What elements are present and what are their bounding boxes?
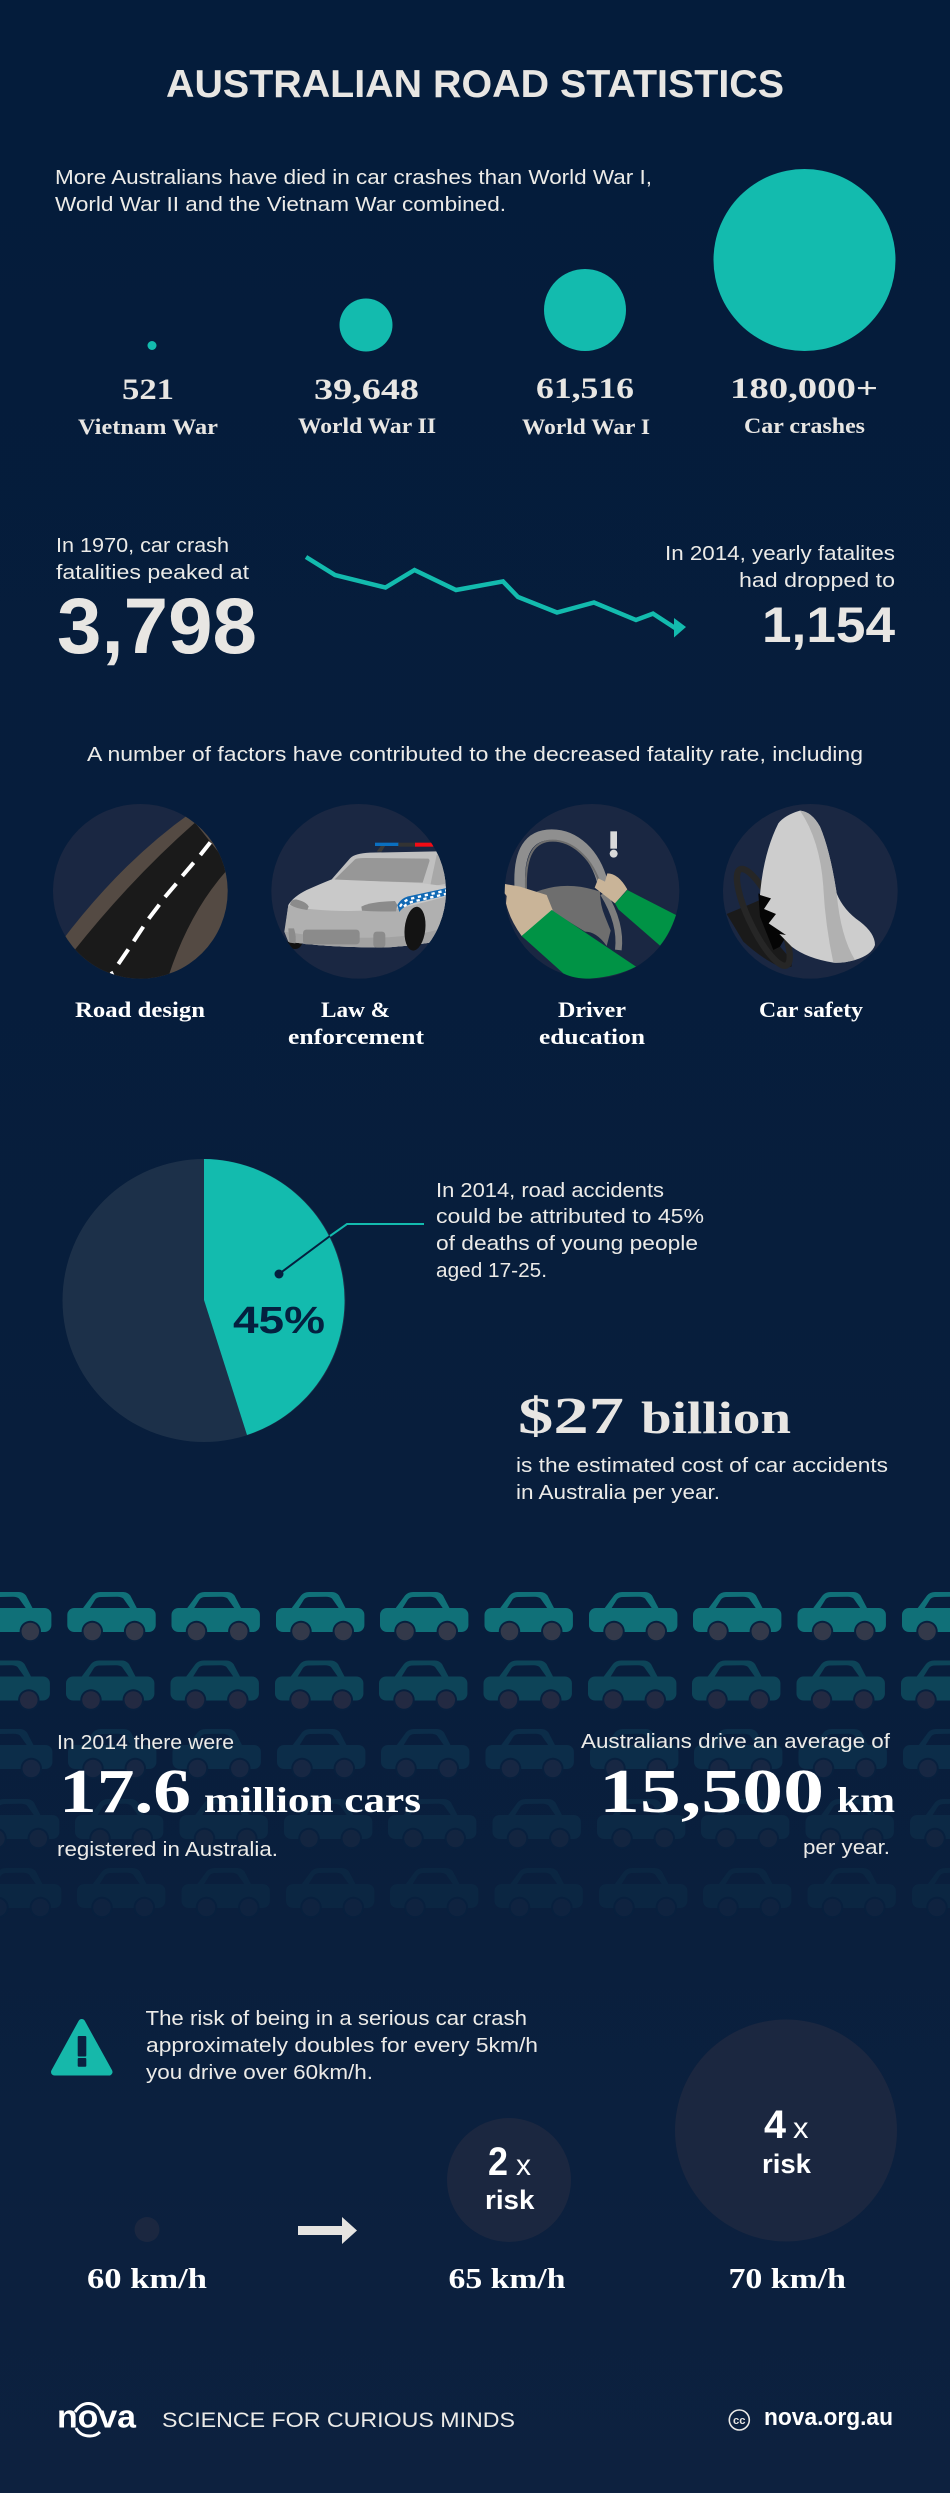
arrow: [298, 2217, 357, 2244]
label: 521 Vietnam War: [78, 373, 218, 439]
risk explanation text: [146, 2008, 538, 2084]
label: 70 km/h: 70 km/h: [728, 2264, 847, 2295]
callout text: could be attributed to 45%: [436, 1206, 704, 1228]
icon: airbag: [723, 804, 898, 979]
bubble: 2x risk: 2: [488, 2140, 508, 2184]
title: AUSTRALIAN ROAD STATISTICS: [166, 63, 784, 106]
text: 2014 figure: [665, 543, 895, 653]
text: 1970 peak: [56, 535, 257, 670]
bubble: 2x risk: risk: [485, 2185, 536, 2215]
text: 1970 peak: fatalities peaked at: [56, 562, 250, 584]
panel: cost of accidents: $27: [518, 1388, 624, 1445]
callout text: aged 17-25.: [436, 1260, 547, 1282]
label: 39,648 World War II: World War II: [298, 413, 436, 438]
bubble: 2x risk: [447, 2118, 571, 2242]
callout text: of deaths of young people: [436, 1233, 698, 1255]
panel: registered cars: In 2014 there were: [57, 1732, 234, 1754]
label: Law & enforcement: enforcement: [288, 1024, 425, 1049]
label: 521 Vietnam War: 521: [122, 373, 174, 406]
line chart: decline in fatalities: [306, 557, 686, 638]
text: 2014 figure: had dropped to: [739, 570, 895, 592]
panel: cost of accidents: billion: [641, 1392, 791, 1443]
label: Driver education: education: [539, 1024, 645, 1049]
panel: registered cars: [57, 1732, 421, 1861]
label: 521 Vietnam War: Vietnam War: [78, 414, 218, 439]
label: 61,516 World War I: 61,516: [536, 372, 634, 405]
bubble: World War II: [340, 298, 392, 352]
website: nova.org.au: [764, 2404, 893, 2431]
label: Law & enforcement: Law &: [321, 997, 390, 1022]
callout text: [436, 1180, 704, 1282]
label: 61,516 World War I: World War I: [522, 414, 650, 439]
icon: creative commons: cc: [733, 2415, 746, 2427]
panel: registered cars: million cars: [204, 1780, 421, 1820]
label: Law & enforcement: [288, 997, 425, 1049]
icon: police car: [271, 804, 450, 979]
callout leader line: [274, 1224, 424, 1278]
panel: young people deaths pie: [62, 1159, 704, 1442]
text: 1970 peak: In 1970, car crash: [56, 535, 229, 557]
footer: [57, 2398, 893, 2436]
panel: registered cars: 17.6: [59, 1758, 191, 1826]
label: 39,648 World War II: 39,648: [314, 373, 419, 406]
text: 2014 figure: In 2014, yearly fatalites: [665, 543, 895, 565]
icon: warning triangle: [54, 2022, 109, 2072]
text: 2014 figure: 1,154: [762, 597, 895, 653]
bubble: 2x risk: x: [516, 2149, 531, 2182]
tagline: SCIENCE FOR CURIOUS MINDS: [162, 2409, 515, 2432]
pie chart: 45%: [62, 1159, 346, 1442]
label: 65 km/h: 65 km/h: [448, 2264, 566, 2295]
panel: deaths comparison: [55, 167, 896, 439]
panel: distance driven: [581, 1731, 895, 1859]
bubble: 60 km/h: [134, 2217, 160, 2242]
label: 60 km/h: 60 km/h: [87, 2264, 208, 2295]
panel: registered cars: registered in Australia.: [57, 1839, 278, 1861]
panel: factors: [53, 804, 898, 1049]
logo: nova: nova: [57, 2398, 136, 2434]
risk explanation text: approximately doubles for every 5km/h: [146, 2035, 538, 2057]
label: 180,000+ Car crashes: 180,000+: [730, 372, 878, 405]
label: 61,516 World War I: [522, 372, 650, 439]
panel: cost of accidents: is the estimated cost of car accidents: [516, 1455, 888, 1477]
panel: cost of accidents: in Australia per year.: [516, 1482, 720, 1504]
label: Driver education: Driver: [558, 997, 626, 1022]
label: Driver education: [539, 997, 645, 1049]
car rows background pattern: [0, 1592, 950, 1918]
label: 180,000+ Car crashes: [730, 372, 878, 438]
icon: road: [53, 804, 228, 979]
panel: fatalities trend: [56, 535, 895, 670]
icon: hands on steering wheel: [505, 804, 679, 979]
bubble: 4x risk: 4: [764, 2103, 787, 2147]
bubble: car crashes: [714, 169, 896, 351]
panel: cost of accidents: [516, 1388, 888, 1504]
bubble: World War I: [544, 269, 626, 351]
bubble: Vietnam War: [148, 341, 156, 350]
risk explanation text: you drive over 60km/h.: [146, 2062, 373, 2084]
factors heading: A number of factors have contributed to the decreased fatality rate, including: [87, 744, 863, 766]
bubble: 4x risk: [675, 2020, 897, 2242]
label: Car safety: Car safety: [759, 997, 863, 1022]
bubble: 4x risk: risk: [762, 2149, 812, 2179]
label: 39,648 World War II: [298, 373, 436, 438]
intro text: World War II and the Vietnam War combined.: [55, 194, 506, 216]
panel: distance driven: Australians drive an average of: [581, 1731, 890, 1753]
risk explanation text: The risk of being in a serious car crash: [146, 2008, 527, 2030]
bubble: 4x risk: x: [793, 2112, 808, 2145]
text: 1970 peak: 3,798: [57, 581, 257, 670]
icon: creative commons: [729, 2410, 749, 2430]
panel: distance driven: 15,500: [599, 1758, 824, 1826]
pie chart: 45%: 45%: [233, 1300, 325, 1342]
callout text: In 2014, road accidents: [436, 1180, 664, 1202]
panel: distance driven: km: [837, 1780, 895, 1820]
label: Road design: Road design: [75, 997, 205, 1022]
label: 180,000+ Car crashes: Car crashes: [744, 413, 865, 438]
panel: distance driven: per year.: [803, 1837, 890, 1859]
intro text: More Australians have died in car crashes than World War I,: [55, 167, 652, 189]
intro text: [55, 167, 652, 216]
panel: speed risk: [54, 2008, 897, 2295]
